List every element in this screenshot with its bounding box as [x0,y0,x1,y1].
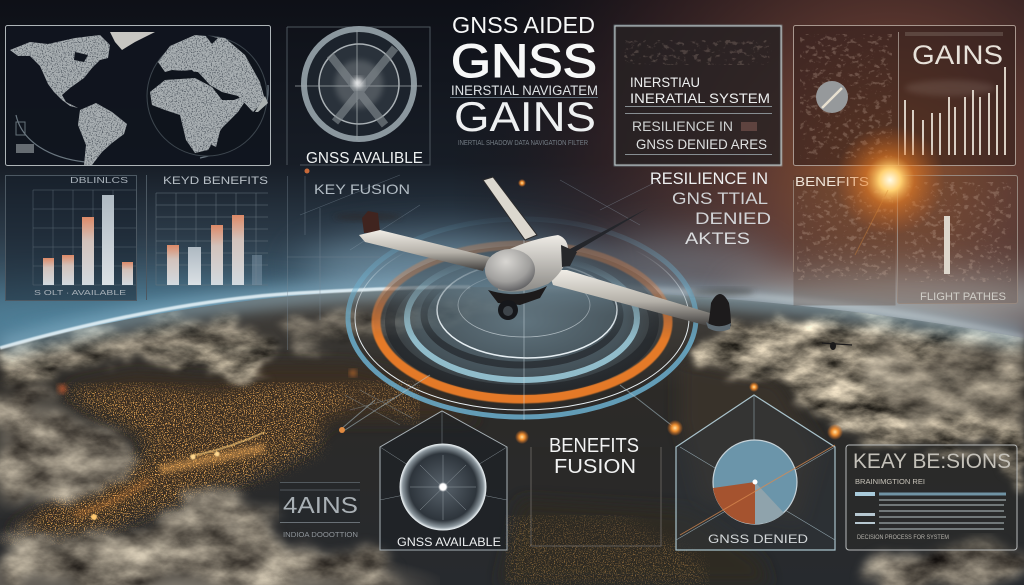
title: GNSS [451,34,597,87]
panel: benefits fusion [531,435,661,546]
label: gains lower left: INDIOA DOOOTTION [283,532,358,539]
bar chart: details: DBLINLCS [70,175,128,185]
title: INERSTIAL NAVIGATEM [451,83,598,98]
panel: inertial system: RESILIENCE IN [632,118,733,134]
title: GAINS [454,93,596,140]
label: gains lower left: 4AINS [283,492,358,518]
cloud mass bottom right [855,545,1024,585]
panel: inertial system: INERSTIAU [630,75,700,90]
panel: key decisions: DECISION PROCESS FOR SYSTEM [857,535,949,541]
panel: GNSS available sphere [380,411,507,550]
panel: inertial system: GNSS DENIED ARES [636,136,767,152]
radar rings [340,219,696,432]
drone left wing [359,230,490,271]
text: resilience in denied areas: AKTES [685,230,750,248]
panel: benefits fusion: BENEFITS [549,435,639,457]
drone [334,177,754,331]
drone right motor [690,288,754,331]
panel: key decisions: KEAY BE:SIONS [853,450,1011,473]
cloud mass bottom [0,558,436,585]
bar chart: details: S OLT · AVAILABLE [34,290,126,297]
panel: inertial system [615,26,781,165]
panel: GNSS denied dial: GNSS DENIED [708,534,808,546]
panel: key decisions [846,445,1017,550]
text: resilience in denied areas: RESILIENCE IN [650,170,768,188]
panel: key decisions: BRAINIMGTION REI [855,479,925,486]
panel: benefits map [794,174,896,306]
title [450,12,598,147]
horizon glow [0,287,1024,348]
drone antenna [568,208,648,255]
panel: inertial system: INERATIAL SYSTEM [630,90,770,106]
panel: gains chart: GAINS [912,40,1003,70]
bar chart: details [6,175,136,300]
drone fuselage [498,235,568,292]
panel: flight paths [898,176,1018,304]
panel: gains chart [794,26,1016,166]
cloud mass left [0,395,125,505]
map continents [10,35,265,165]
title: GNSS AIDED [452,12,595,38]
panel: GNSS denied dial [676,395,835,550]
small distant drone [822,342,852,350]
text: resilience in denied areas [650,170,771,248]
bar chart: key benefits [146,175,268,300]
sun flare [835,125,945,255]
label: GNSS available: GNSS AVALIBLE [306,150,423,167]
panel: key fusion: KEY FUSION [314,181,410,197]
distant cloud band left [0,315,280,385]
bars [905,67,1005,155]
drone left motor [334,211,402,233]
panel: key fusion [287,168,410,350]
title: INERTIAL SHADOW DATA NAVIGATION FILTER [458,140,588,147]
list rows [855,492,1006,529]
label: gains lower left [279,482,360,539]
cloud mass right [690,315,1024,500]
panel: world map [6,26,270,166]
panel: GNSS available sphere: GNSS AVAILABLE [397,537,501,549]
text: resilience in denied areas: DENIED [695,210,771,228]
panel: benefits fusion: FUSION [554,456,636,478]
drone right wing [548,270,712,327]
panel: GNSS available dial [287,27,430,167]
puffy cloud centre [170,350,262,382]
callout nodes [339,179,843,444]
panel: benefits map: BENEFITS [795,174,869,189]
bar chart: key benefits: KEYD BENEFITS [163,175,268,187]
drone tail fin [483,177,537,240]
earth surface with clouds and city lights [0,287,1024,585]
panel: flight paths: FLIGHT PATHES [920,291,1006,303]
text: resilience in denied areas: GNS TTIAL [672,190,768,208]
